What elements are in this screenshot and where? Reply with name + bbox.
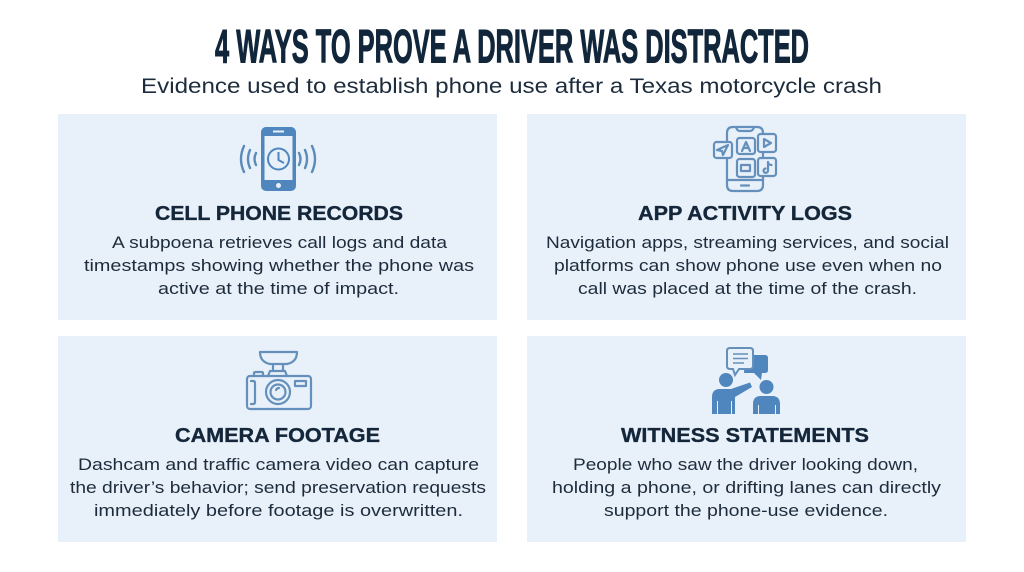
panel: cell phone records	[58, 114, 497, 320]
body text: immediately before footage is overwritten.	[94, 501, 463, 520]
body text: active at the time of impact.	[158, 279, 399, 298]
body text: A subpoena retrieves call logs and data	[112, 233, 448, 252]
body text	[552, 455, 942, 520]
body text: holding a phone, or drifting lanes can directly	[552, 478, 942, 497]
body text	[70, 455, 486, 520]
heading: CAMERA FOOTAGE	[175, 425, 380, 447]
body text: platforms can show phone use even when no	[554, 256, 942, 275]
panel: app activity logs	[527, 114, 966, 320]
heading: WITNESS STATEMENTS	[621, 425, 869, 447]
icon: dashcam	[247, 352, 311, 409]
body text: People who saw the driver looking down,	[573, 455, 918, 474]
heading: CELL PHONE RECORDS	[155, 203, 403, 225]
icon: ringing phone with clock	[241, 127, 315, 191]
icon: two people with speech bubbles	[712, 348, 780, 414]
body text: the driver’s behavior; send preservation requests	[70, 478, 486, 497]
body text: timestamps showing whether the phone was	[84, 256, 474, 275]
body text: support the phone-use evidence.	[604, 501, 888, 520]
body text	[546, 233, 949, 298]
body text: call was placed at the time of the crash.	[578, 279, 917, 298]
body text: Dashcam and traffic camera video can capture	[78, 455, 479, 474]
body text	[84, 233, 474, 298]
heading: APP ACTIVITY LOGS	[638, 203, 852, 225]
icon: phone with app tiles	[714, 127, 776, 191]
subtitle: Evidence used to establish phone use after a Texas motorcycle crash	[141, 74, 882, 98]
panel: witness statements	[527, 336, 966, 542]
body text: Navigation apps, streaming services, and social	[546, 233, 949, 252]
panel: camera footage	[58, 336, 497, 542]
